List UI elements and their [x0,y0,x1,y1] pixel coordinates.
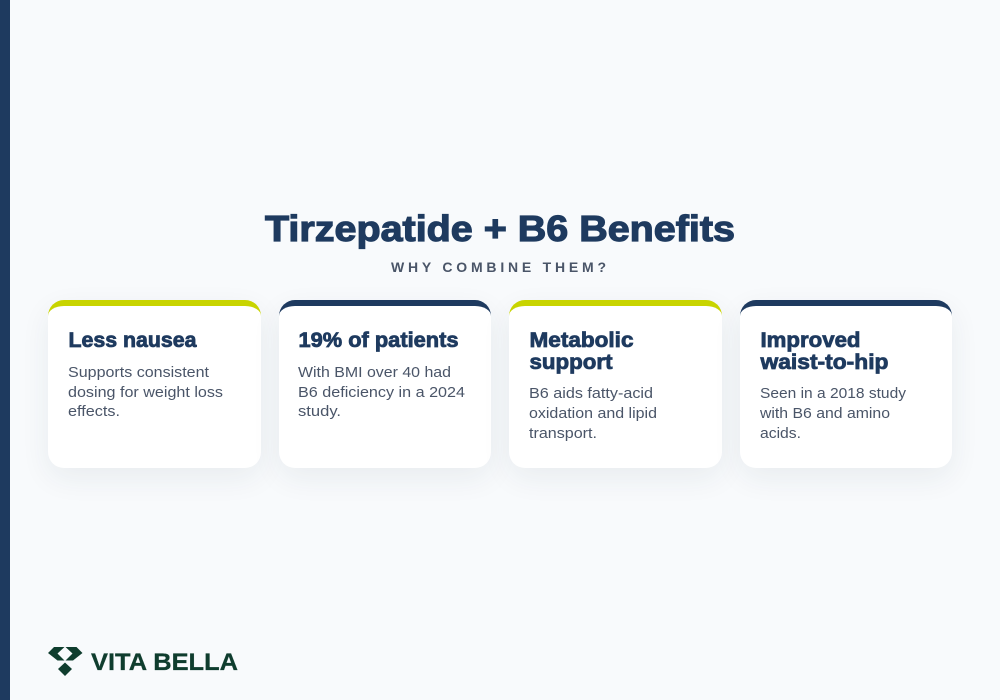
panel: metabolic support: transport. [529,425,597,442]
panel: improved waist-to-hip: acids. [760,425,801,442]
panel: improved waist-to-hip [740,300,952,468]
panel: improved waist-to-hip: with B6 and amino [759,405,890,422]
subtitle: WHY COMBINE THEM? [391,259,606,275]
panel: improved waist-to-hip: waist-to-hip [759,351,888,374]
panel: improved waist-to-hip: Seen in a 2018 study [760,385,907,402]
panel: less nausea: Less nausea [68,329,197,352]
panel: less nausea: effects. [68,403,120,420]
left accent bar [0,0,10,700]
panel: metabolic support [509,300,722,468]
panel: 19% of patients: study. [298,403,341,420]
panel: improved waist-to-hip: Improved [760,329,860,352]
panel: 19% of patients: 19% of patients [298,329,458,352]
panel: 19% of patients: With BMI over 40 had [298,364,451,381]
panel: metabolic support: support [530,351,613,374]
icon: logo mark [48,647,82,676]
panel: less nausea: Supports consistent [68,364,210,381]
panel: metabolic support: B6 aids fatty-acid [529,385,653,402]
panel: less nausea [48,300,261,468]
title: Tirzepatide + B6 Benefits [265,208,735,249]
panel: 19% of patients: B6 deficiency in a 2024 [298,384,465,401]
wordmark: VITA BELLA [91,649,238,676]
panel: metabolic support: Metabolic [530,329,634,352]
panel: less nausea: dosing for weight loss [68,384,223,401]
panel: metabolic support: oxidation and lipid [529,405,657,422]
panel: 19% of patients [279,300,491,468]
